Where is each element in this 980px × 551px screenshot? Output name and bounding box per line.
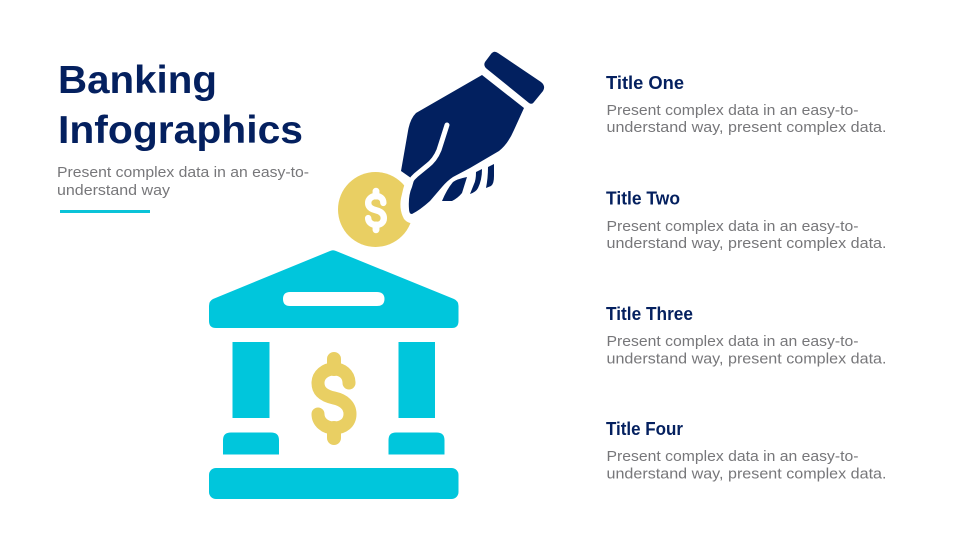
item: title one: Present complex data in an easy-to-	[606, 102, 859, 119]
item: title one	[606, 73, 886, 136]
icon: hand dropping coin	[400, 52, 544, 223]
hand body	[401, 75, 524, 214]
building roof	[209, 250, 458, 328]
subtitle	[57, 164, 309, 199]
title: Infographics	[58, 109, 303, 152]
icon: bank building	[209, 250, 458, 499]
item: title two: understand way, present complex data.	[606, 235, 886, 252]
item: title two: Present complex data in an easy-to-	[606, 218, 859, 235]
white halo around coin edge	[400, 176, 418, 223]
accent underline	[60, 210, 150, 213]
finger one	[442, 177, 467, 201]
item: title one: understand way, present complex data.	[606, 119, 886, 136]
right column base	[388, 432, 444, 454]
item: title three	[606, 304, 886, 368]
item: title four: Present complex data in an easy-to-	[606, 448, 859, 465]
finger crease	[407, 125, 447, 190]
finger two	[470, 169, 482, 194]
item: title one: Title One	[606, 73, 684, 93]
title: Banking	[58, 59, 217, 102]
item: title four	[606, 419, 886, 482]
item: title three: Present complex data in an easy-to-	[606, 333, 859, 350]
finger three	[486, 164, 494, 188]
item: title two	[606, 188, 886, 252]
icon: dollar sign on coin	[368, 191, 384, 230]
title	[58, 59, 303, 152]
left column	[232, 342, 270, 418]
left column base	[223, 432, 279, 454]
item: title three: Title Three	[606, 304, 693, 324]
item: title four: Title Four	[606, 419, 683, 439]
building floor	[209, 468, 458, 499]
item: title three: understand way, present complex data.	[606, 350, 886, 368]
icon: gold coin	[338, 172, 413, 247]
hand cuff	[484, 52, 544, 104]
item: title four: understand way, present complex data.	[606, 466, 886, 482]
icon: dollar sign on building	[318, 359, 350, 438]
right column	[398, 342, 435, 418]
subtitle: Present complex data in an easy-to-	[57, 164, 309, 181]
item: title two: Title Two	[606, 188, 680, 208]
subtitle: understand way	[57, 182, 171, 199]
